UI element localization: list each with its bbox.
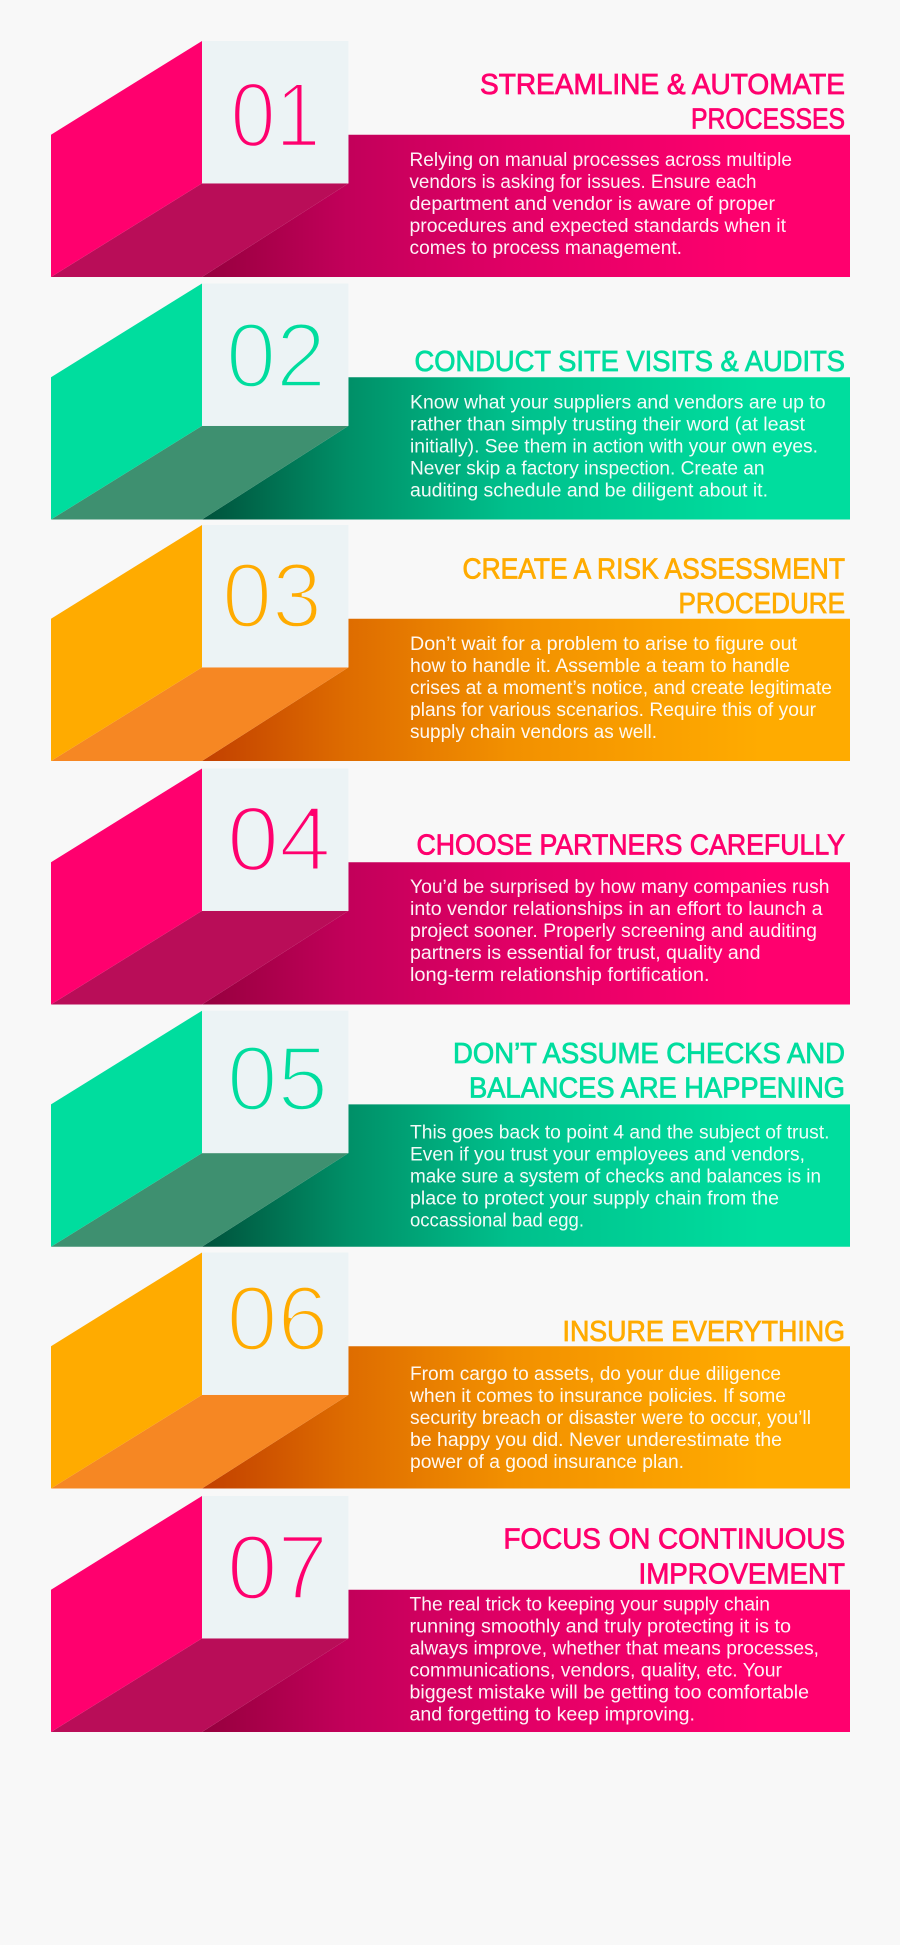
body text: [410, 392, 826, 502]
body text: initially). See them in action with your own eyes.: [410, 436, 818, 458]
body text: department and vendor is aware of proper: [410, 193, 775, 215]
heading: FOCUS ON CONTINUOUS: [504, 1524, 845, 1556]
body text: Know what your suppliers and vendors are up to: [410, 392, 826, 414]
body text: security breach or disaster were to occur, you’ll: [410, 1407, 811, 1429]
body text: [410, 1594, 819, 1726]
body text: rather than simply trusting their word (at least: [410, 414, 806, 436]
body text: auditing schedule and be diligent about it.: [410, 480, 768, 502]
body text: comes to process management.: [410, 237, 682, 259]
body text: place to protect your supply chain from the: [410, 1188, 779, 1210]
body text: biggest mistake will be getting too comfortable: [410, 1682, 809, 1704]
panel: step 01 streamline and automate: [51, 41, 850, 277]
body text: The real trick to keeping your supply chain: [410, 1594, 770, 1616]
body text: Even if you trust your employees and vendors,: [410, 1144, 805, 1166]
body text: and forgetting to keep improving.: [410, 1704, 695, 1726]
panel: step 05 checks and balances: [51, 1011, 850, 1247]
number 07: 07: [227, 1517, 328, 1619]
body text: Never skip a factory inspection. Create an: [410, 458, 764, 480]
heading: IMPROVEMENT: [638, 1558, 845, 1590]
body text: communications, vendors, quality, etc. Your: [410, 1660, 782, 1682]
3D block shape: [51, 284, 850, 520]
body text: [409, 1363, 811, 1473]
heading: [462, 554, 845, 620]
3D block shape: [51, 525, 850, 761]
heading: PROCESSES: [691, 104, 845, 136]
body text: into vendor relationships in an effort to launch a: [410, 898, 823, 920]
panel: step 03 risk assessment procedure: [51, 525, 850, 761]
body text: vendors is asking for issues. Ensure each: [410, 171, 756, 193]
panel: step 04 choose partners carefully: [51, 768, 850, 1004]
heading: CREATE A RISK ASSESSMENT: [462, 554, 845, 586]
3D block shape: [51, 1496, 850, 1732]
number 02: 02: [226, 305, 326, 407]
body text: This goes back to point 4 and the subject of trust.: [410, 1122, 830, 1144]
body text: when it comes to insurance policies. If some: [409, 1385, 786, 1407]
heading: [504, 1524, 845, 1590]
number 05: 05: [227, 1028, 328, 1130]
body text: crises at a moment’s notice, and create legitimate: [410, 677, 832, 699]
3D block shape: [51, 1252, 850, 1488]
body text: [410, 1122, 830, 1232]
body text: power of a good insurance plan.: [410, 1451, 684, 1473]
body text: Relying on manual processes across multiple: [410, 149, 792, 171]
body text: be happy you did. Never underestimate the: [410, 1429, 782, 1451]
heading: [480, 69, 845, 136]
body text: supply chain vendors as well.: [410, 721, 657, 743]
panel: step 06 insure everything: [51, 1252, 850, 1488]
heading: BALANCES ARE HAPPENING: [469, 1072, 845, 1104]
body text: project sooner. Properly screening and auditing: [410, 920, 817, 942]
number 01: 01: [230, 64, 320, 166]
3D block shape: [51, 768, 850, 1004]
body text: procedures and expected standards when it: [410, 215, 787, 237]
body text: occassional bad egg.: [410, 1210, 584, 1232]
body text: running smoothly and truly protecting it is to: [410, 1616, 791, 1638]
body text: plans for various scenarios. Require this of your: [410, 699, 816, 721]
3D block shape: [51, 41, 850, 277]
heading: STREAMLINE & AUTOMATE: [480, 69, 845, 101]
heading: DON’T ASSUME CHECKS AND: [453, 1038, 845, 1070]
heading: [453, 1038, 845, 1104]
body text: make sure a system of checks and balances is in: [410, 1166, 821, 1188]
3D block shape: [51, 1011, 850, 1247]
body text: [410, 633, 832, 743]
number 04: 04: [227, 788, 331, 890]
body text: Don’t wait for a problem to arise to figure out: [410, 633, 798, 655]
body text: partners is essential for trust, quality and: [410, 942, 760, 964]
number 03: 03: [222, 545, 322, 647]
body text: how to handle it. Assemble a team to handle: [410, 655, 790, 677]
number 06: 06: [226, 1268, 328, 1370]
body text: [410, 876, 830, 986]
panel: step 07 continuous improvement: [51, 1496, 850, 1732]
heading: INSURE EVERYTHING: [562, 1316, 845, 1348]
heading: CONDUCT SITE VISITS & AUDITS: [414, 346, 845, 378]
body text: [410, 149, 792, 259]
body text: You’d be surprised by how many companies rush: [410, 876, 830, 898]
heading: CHOOSE PARTNERS CAREFULLY: [416, 830, 845, 862]
panel: step 02 site visits and audits: [51, 284, 850, 520]
body text: From cargo to assets, do your due diligence: [410, 1363, 781, 1385]
body text: always improve, whether that means processes,: [410, 1638, 819, 1660]
body text: long-term relationship fortification.: [410, 964, 710, 986]
heading: PROCEDURE: [678, 588, 845, 620]
